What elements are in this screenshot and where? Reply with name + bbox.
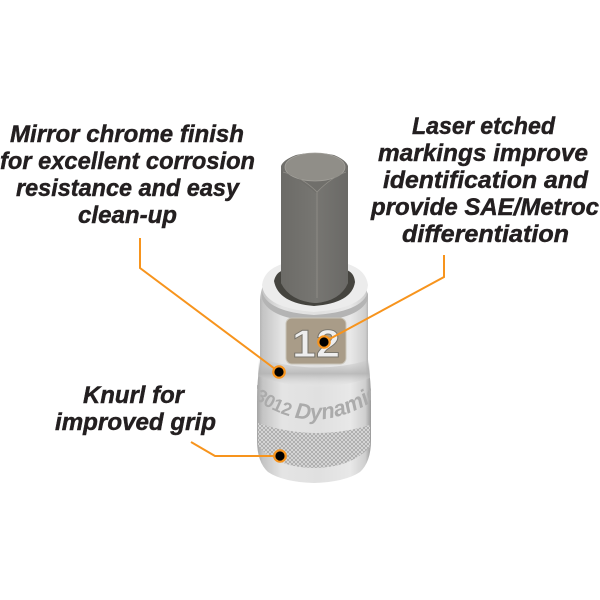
leader: laser markings: [318, 255, 444, 348]
callout: laser markings: differentiation: [402, 221, 569, 248]
bit top face: [281, 153, 348, 192]
callout: laser markings: provide SAE/Metroc: [370, 194, 599, 221]
etched part number: 13012 Dynamic: [257, 385, 371, 424]
knurl band: [258, 423, 370, 468]
callout: chrome finish: Mirror chrome finish: [10, 121, 244, 148]
socket top rim: [262, 264, 368, 312]
callout: knurl: [55, 382, 216, 436]
callout: laser markings: markings improve: [378, 140, 588, 167]
callout: knurl: improved grip: [55, 409, 216, 436]
size number: 12: [292, 323, 340, 366]
hex bit: [281, 153, 348, 303]
callout: laser markings: [370, 113, 599, 248]
callout: knurl: Knurl for: [83, 382, 186, 409]
callout: chrome finish: resistance and easy: [16, 175, 241, 202]
socket: [257, 152, 371, 483]
leader: chrome finish: [140, 238, 285, 378]
bit right face: [316, 168, 348, 303]
callout: laser markings: identification and: [383, 167, 589, 194]
callout: chrome finish: [0, 121, 255, 229]
callout: laser markings: Laser etched: [412, 113, 556, 140]
bit left face: [281, 168, 316, 303]
socket body: [257, 271, 371, 483]
size plate: [286, 318, 346, 366]
leader: knurl: [191, 442, 286, 462]
infographic: hex bit socket features: [0, 116, 599, 483]
chrome neck shading: [258, 358, 370, 387]
callout: chrome finish: clean-up: [78, 202, 177, 229]
callout: chrome finish: for excellent corrosion: [0, 148, 255, 175]
